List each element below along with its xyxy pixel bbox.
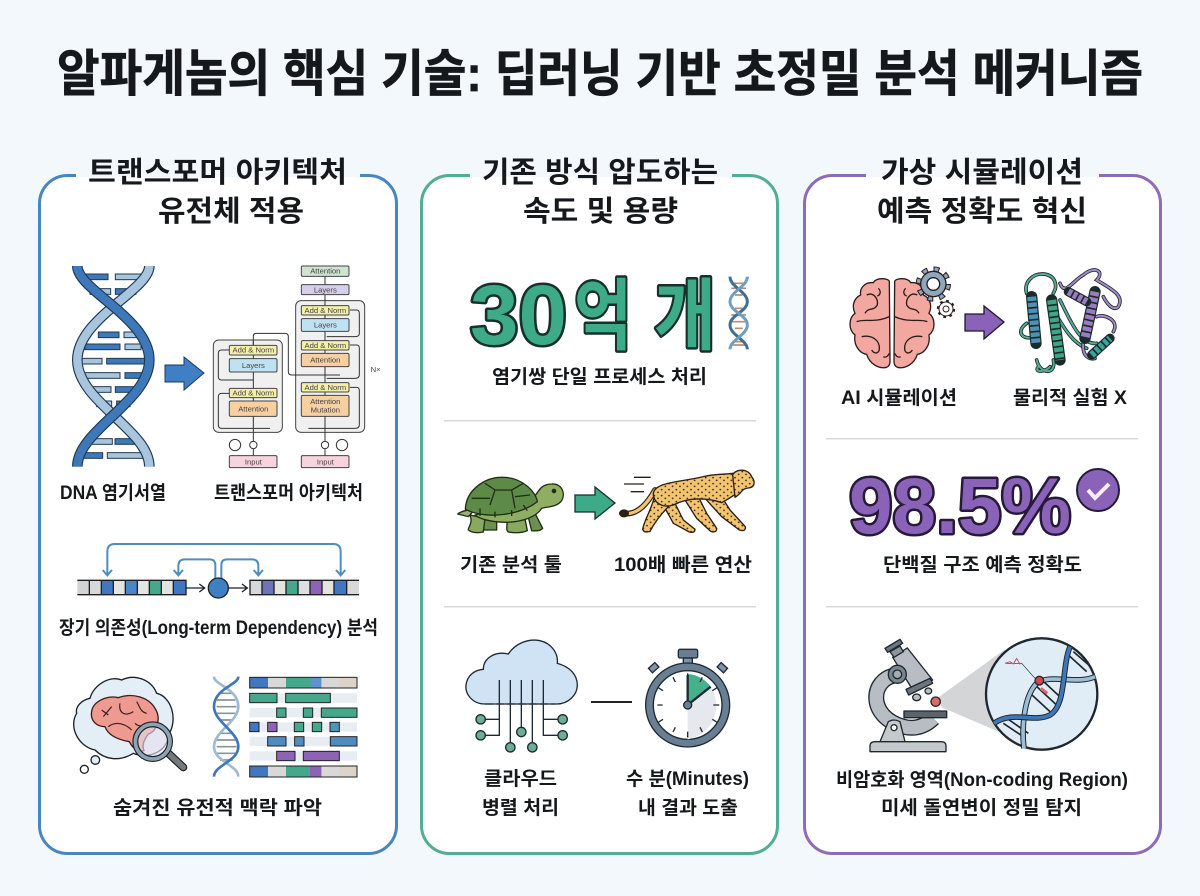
icon: microscope with magnified DNA (870, 638, 1097, 752)
icon: AI brain with gears (850, 270, 954, 368)
label: results within minutes: 수 분(Minutes) (626, 768, 749, 790)
label: base pairs single process: 염기쌍 단일 프로세스 처리 (492, 366, 707, 388)
chart: transformer architecture diagram: N× (371, 365, 381, 374)
label: long-term dependency: 장기 의존성(Long-term Dependency) 분석 (59, 617, 378, 639)
icon: turtle (458, 477, 563, 533)
chart: transformer architecture diagram: Add & Norm (304, 383, 346, 392)
chart: transformer architecture diagram: Mutation (311, 406, 340, 415)
chart: transformer architecture diagram: Add & Norm (304, 341, 346, 350)
icon: check badge (1077, 469, 1119, 511)
stat: 98.5 percent: 98.5% (849, 461, 1071, 550)
connector line (591, 701, 632, 703)
icon: cheetah (620, 470, 754, 532)
chart: transformer architecture diagram: Input (245, 457, 263, 466)
label: AI simulation: AI 시뮬레이션 (841, 387, 957, 409)
label: non-coding region mutation detection: 미세 돌연변이 정밀 탐지 (881, 797, 1082, 819)
arrow: simulation to protein (965, 306, 1004, 339)
heading: panel 2: 기존 방식 압도하는 (482, 156, 718, 189)
chart: long-term dependency sequence (77, 544, 359, 598)
label: existing tools: 기존 분석 툴 (460, 554, 562, 576)
chart: transformer architecture diagram: Layers (314, 285, 337, 294)
heading: panel 1 (88, 156, 347, 228)
heading: panel 2: 속도 및 용량 (523, 195, 678, 228)
panel: virtual simulation (804, 156, 1160, 854)
label: no physical experiment: 물리적 실험 X (1013, 387, 1127, 409)
chart: transformer architecture diagram: Attention (310, 356, 340, 365)
chart: transformer architecture diagram: Attention (310, 267, 340, 276)
heading: panel 1: 유전체 적용 (158, 195, 304, 228)
title: 알파게놈의 핵심 기술: 딥러닝 기반 초정밀 분석 메커니즘 (57, 46, 1143, 102)
chart: transformer architecture diagram (213, 266, 381, 468)
icon: cloud network (466, 640, 577, 752)
panel: transformer architecture (40, 156, 396, 854)
label: results within minutes (626, 768, 749, 819)
chart: transformer architecture diagram: Add & Norm (304, 306, 346, 315)
label: cloud parallel processing: 클라우드 (484, 768, 557, 790)
panel: speed and capacity (422, 156, 778, 854)
icon: protein structure (1021, 270, 1120, 371)
heading: panel 3: 예측 정확도 혁신 (877, 195, 1087, 228)
label: cloud parallel processing (482, 768, 559, 819)
label: DNA sequence: DNA 염기서열 (60, 482, 166, 504)
label: cloud parallel processing: 병렬 처리 (482, 797, 559, 819)
heading: panel 3: 가상 시뮬레이션 (881, 156, 1083, 189)
heading: panel 2 (482, 156, 718, 228)
chart: transformer architecture diagram: Attention (238, 404, 268, 413)
chart: transformer architecture diagram: Add & Norm (232, 389, 274, 398)
label: transformer architecture: 트랜스포머 아키텍처 (214, 482, 363, 504)
chart: transformer architecture diagram: Layers (314, 321, 337, 330)
label: non-coding region mutation detection: 비암호화 영역(Non-coding Region) (836, 769, 1128, 791)
stat: 3 billion: 개 (654, 272, 716, 360)
label: results within minutes: 내 결과 도출 (638, 797, 738, 819)
label: protein structure accuracy: 단백질 구조 예측 정확도 (883, 554, 1082, 576)
icon: small DNA (730, 277, 747, 349)
heading: panel 3 (877, 156, 1087, 228)
chart: transformer architecture diagram: Add & Norm (232, 346, 274, 355)
chart: transformer architecture diagram: Input (317, 457, 335, 466)
chart: transformer architecture diagram: Attention (310, 397, 340, 406)
stat: 3 billion (470, 268, 716, 362)
icon: stopwatch (646, 649, 730, 747)
stat: 3 billion: 억 (574, 272, 632, 360)
label: hidden genetic context: 숨겨진 유전적 맥락 파악 (113, 797, 322, 819)
chart: transformer architecture diagram: Layers (242, 361, 265, 370)
label: non-coding region mutation detection (836, 769, 1128, 819)
icon: small DNA with alignment rows (214, 677, 357, 777)
stat: 3 billion: 30 (470, 268, 567, 362)
icon: brain in thought bubble with magnifier (74, 677, 183, 773)
icon: DNA helix (77, 266, 149, 467)
arrow: DNA to transformer (165, 357, 204, 390)
arrow: tortoise to cheetah (575, 487, 615, 519)
label: 100x faster: 100배 빠른 연산 (614, 554, 752, 576)
heading: panel 1: 트랜스포머 아키텍처 (88, 156, 347, 189)
